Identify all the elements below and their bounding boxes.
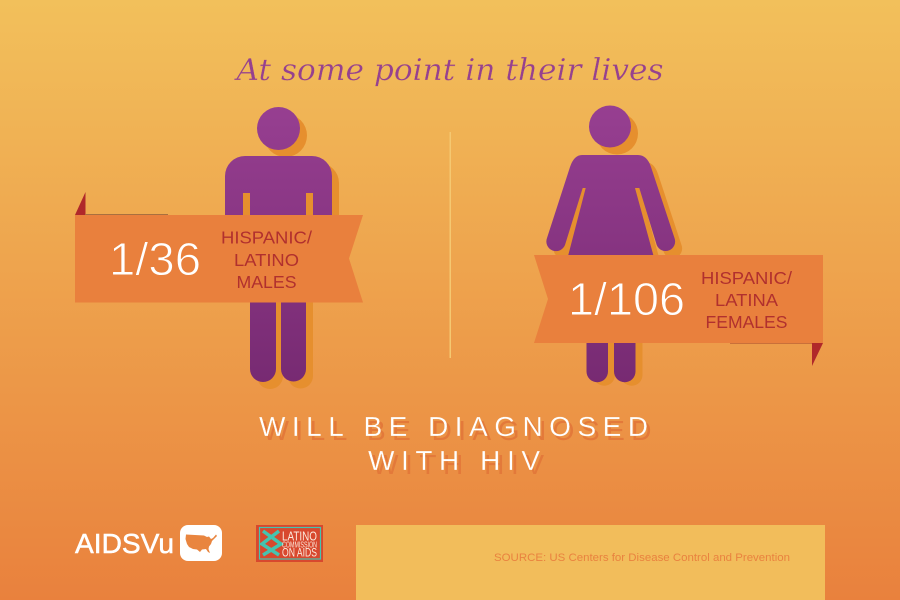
male silhouette [225,107,332,382]
female statistic: 1/106 [568,273,685,325]
male label: MALES [236,272,296,292]
male ribbon [75,192,363,302]
centre divider [450,132,451,358]
conclusion heading: WILL BE DIAGNOSED [259,411,648,442]
male shadow [232,114,339,389]
conclusion heading [259,411,652,480]
logo text [282,528,317,560]
male statistic: 1/36 [109,233,201,285]
icon: US map badge [180,525,222,561]
ribbon band [75,215,363,302]
conclusion heading: WILL BE DIAGNOSED [262,415,652,446]
female label: LATINA [715,290,778,310]
logo: Latino Commission on AIDS [256,525,323,562]
female label: FEMALES [706,312,788,332]
panel background [356,525,825,600]
female label [701,268,792,332]
title: At some point in their lives [233,53,663,88]
logo text: LATINO [282,528,317,544]
male figure [225,107,339,389]
ribbon band [534,255,823,343]
female silhouette [546,106,675,382]
female figure [546,106,682,386]
male label: HISPANIC/ [221,228,312,248]
logo text: ON AIDS [282,546,317,560]
source text: SOURCE: US Centers for Disease Control and Prevention [494,552,790,564]
source panel [356,525,825,600]
logo frame [256,525,323,562]
male label: LATINO [234,250,299,270]
wordmark: AIDSVu [75,528,174,559]
ribbon fold [75,192,86,215]
logo text: COMMISSION [282,540,317,550]
logo mark [262,531,281,555]
logo: AIDSVu [75,525,222,561]
conclusion heading: WITH HIV [368,445,540,476]
female ribbon [534,255,823,366]
male label [221,228,312,292]
ribbon fold [812,343,823,366]
female label: HISPANIC/ [701,268,792,288]
conclusion heading: WITH HIV [372,449,544,480]
female shadow [553,112,682,386]
